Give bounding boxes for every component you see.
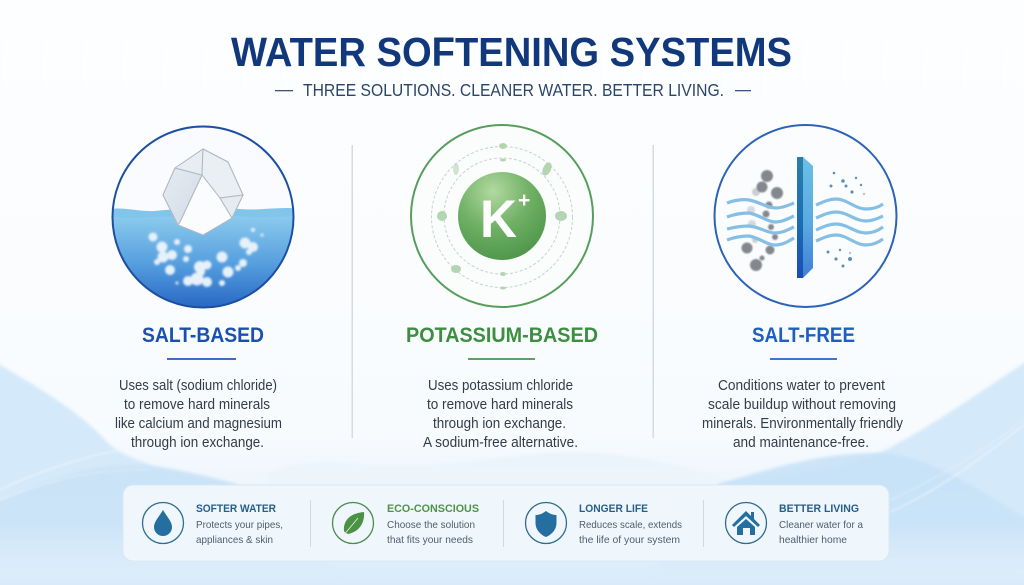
fine particles [826, 172, 865, 268]
benefit: eco-conscious [332, 502, 479, 546]
heading: SALT-FREE [752, 324, 855, 347]
benefit: better living: BETTER LIVING [779, 503, 859, 515]
benefit: softer water [142, 502, 283, 546]
right waves [650, 350, 1024, 575]
body text: minerals. Environmentally friendly [702, 416, 904, 432]
membrane [797, 157, 803, 278]
icon: potassium ion [411, 125, 593, 307]
body text: Conditions water to prevent [718, 378, 885, 394]
benefit: softer water: appliances & skin [196, 534, 273, 546]
left waves [0, 353, 340, 575]
body text: A sodium-free alternative. [423, 435, 578, 451]
benefit: better living [726, 502, 863, 546]
benefit: better living: healthier home [779, 534, 847, 546]
body text [702, 378, 904, 451]
body text: scale buildup without removing [708, 397, 896, 413]
benefit: eco-conscious: that fits your needs [387, 534, 473, 546]
icon: salt crystal in water [110, 126, 300, 310]
bubbles [148, 228, 264, 287]
icon: water drop [142, 502, 184, 544]
body text: through ion exchange. [131, 435, 264, 451]
benefit: longer life: the life of your system [579, 534, 680, 546]
icon: leaf [332, 502, 374, 544]
title: WATER SOFTENING SYSTEMS [231, 29, 792, 75]
body text: to remove hard minerals [427, 397, 573, 413]
benefit: eco-conscious: Choose the solution [387, 519, 475, 531]
benefit: softer water: Protects your pipes, [196, 519, 283, 531]
body text [115, 378, 282, 451]
icon: potassium ion: + [518, 189, 530, 212]
icon: potassium ion: K [480, 190, 517, 249]
heading: POTASSIUM-BASED [406, 324, 598, 347]
heading: SALT-BASED [142, 324, 264, 347]
body text [423, 378, 578, 451]
body text: and maintenance-free. [733, 435, 869, 451]
centre wave [267, 453, 729, 500]
icon: house [726, 502, 766, 544]
column dividers [352, 145, 654, 438]
body text: Uses salt (sodium chloride) [119, 378, 277, 394]
benefit: better living: Cleaner water for a [779, 519, 863, 531]
body text: Uses potassium chloride [428, 378, 573, 394]
benefit: longer life [526, 502, 682, 546]
benefit: longer life: LONGER LIFE [579, 503, 648, 515]
body text: like calcium and magnesium [115, 416, 282, 432]
panel: benefits bar [123, 485, 889, 561]
panel: salt-based [110, 126, 300, 451]
benefit: softer water: SOFTER WATER [196, 503, 276, 515]
crystal [163, 149, 243, 235]
water waves [727, 199, 883, 245]
body text: to remove hard minerals [124, 397, 270, 413]
subtitle: THREE SOLUTIONS. CLEANER WATER. BETTER LIVING. [303, 80, 724, 100]
body text: through ion exchange. [433, 416, 566, 432]
icon: filter membrane [714, 125, 896, 307]
mineral particles [742, 170, 783, 271]
benefit: eco-conscious: ECO-CONSCIOUS [387, 503, 479, 515]
panel: potassium-based [406, 125, 598, 451]
panel: salt-free [702, 125, 904, 451]
benefit: longer life: Reduces scale, extends [579, 519, 682, 531]
icon: shield [526, 502, 566, 544]
